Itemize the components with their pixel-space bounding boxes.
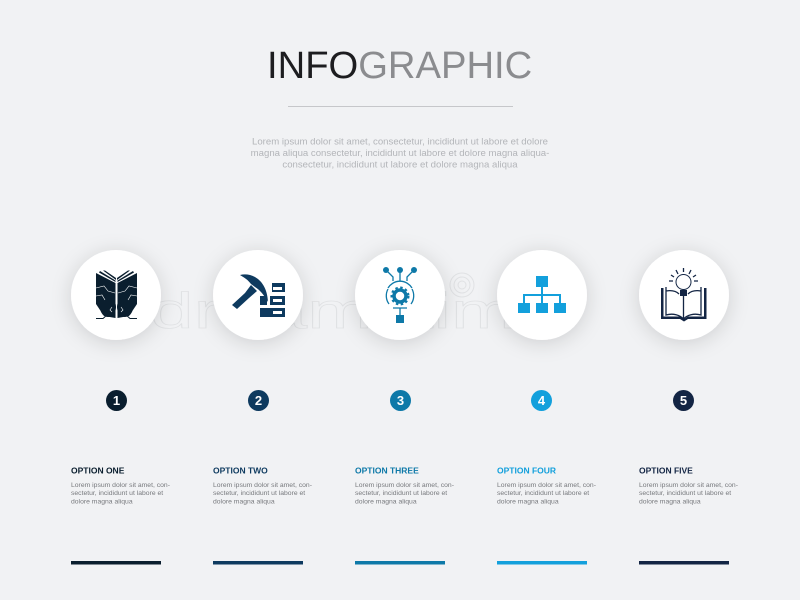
option one text: sectetur, incididunt ut labore et <box>71 490 163 497</box>
intro text: magna aliqua consectetur, incididunt ut labore et dolore magna aliqua- <box>251 148 549 159</box>
number badge 5 <box>673 390 694 411</box>
number badge 1: 1 <box>113 393 120 408</box>
option four text <box>497 466 596 506</box>
option five text <box>639 466 738 506</box>
number badge 2: 2 <box>255 393 262 408</box>
option three text <box>355 466 454 506</box>
option three text: Lorem ipsum dolor sit amet, con- <box>355 482 454 489</box>
number badge 3: 3 <box>397 393 404 408</box>
option three text: dolore magna aliqua <box>355 498 417 506</box>
icon circle 3: gear process <box>355 250 445 340</box>
watermark <box>150 273 560 339</box>
option one text: dolore magna aliqua <box>71 498 133 506</box>
option four text: Lorem ipsum dolor sit amet, con- <box>497 482 596 489</box>
number badge 5: 5 <box>680 393 687 408</box>
option three text: OPTION THREE <box>355 466 419 476</box>
bar 4 <box>497 561 587 564</box>
watermark: dreamstime <box>150 283 560 339</box>
icon circle 1: book with brain <box>71 250 161 340</box>
option one text <box>71 466 170 506</box>
icon circle 2: pickaxe and server <box>213 250 303 340</box>
option two text: sectetur, incididunt ut labore et <box>213 490 305 497</box>
option five text: sectetur, incididunt ut labore et <box>639 490 731 497</box>
option one text: Lorem ipsum dolor sit amet, con- <box>71 482 170 489</box>
option three text: sectetur, incididunt ut labore et <box>355 490 447 497</box>
bar 2 <box>213 561 303 564</box>
option four text: dolore magna aliqua <box>497 498 559 506</box>
option two text: dolore magna aliqua <box>213 498 275 506</box>
number badge 4 <box>531 390 552 411</box>
icon circle 4: hierarchy chart <box>497 250 587 340</box>
number badge 1 <box>106 390 127 411</box>
option two text: Lorem ipsum dolor sit amet, con- <box>213 482 312 489</box>
number badge 3 <box>390 390 411 411</box>
option two text <box>213 466 312 506</box>
option one text: OPTION ONE <box>71 466 125 476</box>
title: INFOGRAPHIC <box>267 44 532 87</box>
intro text: Lorem ipsum dolor sit amet, consectetur, incididunt ut labore et dolore <box>252 136 548 148</box>
intro text: consectetur, incididunt ut labore et dolore magna aliqua <box>282 160 518 170</box>
option four text: OPTION FOUR <box>497 466 556 476</box>
bar 1 <box>71 561 161 564</box>
bar 3 <box>355 561 445 564</box>
option four text: sectetur, incididunt ut labore et <box>497 490 589 497</box>
option five text: Lorem ipsum dolor sit amet, con- <box>639 482 738 489</box>
bar 5 <box>639 561 729 564</box>
option two text: OPTION TWO <box>213 466 268 476</box>
number badge 2 <box>248 390 269 411</box>
option five text: OPTION FIVE <box>639 466 693 476</box>
number badge 4: 4 <box>538 393 546 408</box>
intro text <box>251 136 549 170</box>
option five text: dolore magna aliqua <box>639 498 701 506</box>
icon circle 5: book with light bulb <box>639 250 729 340</box>
